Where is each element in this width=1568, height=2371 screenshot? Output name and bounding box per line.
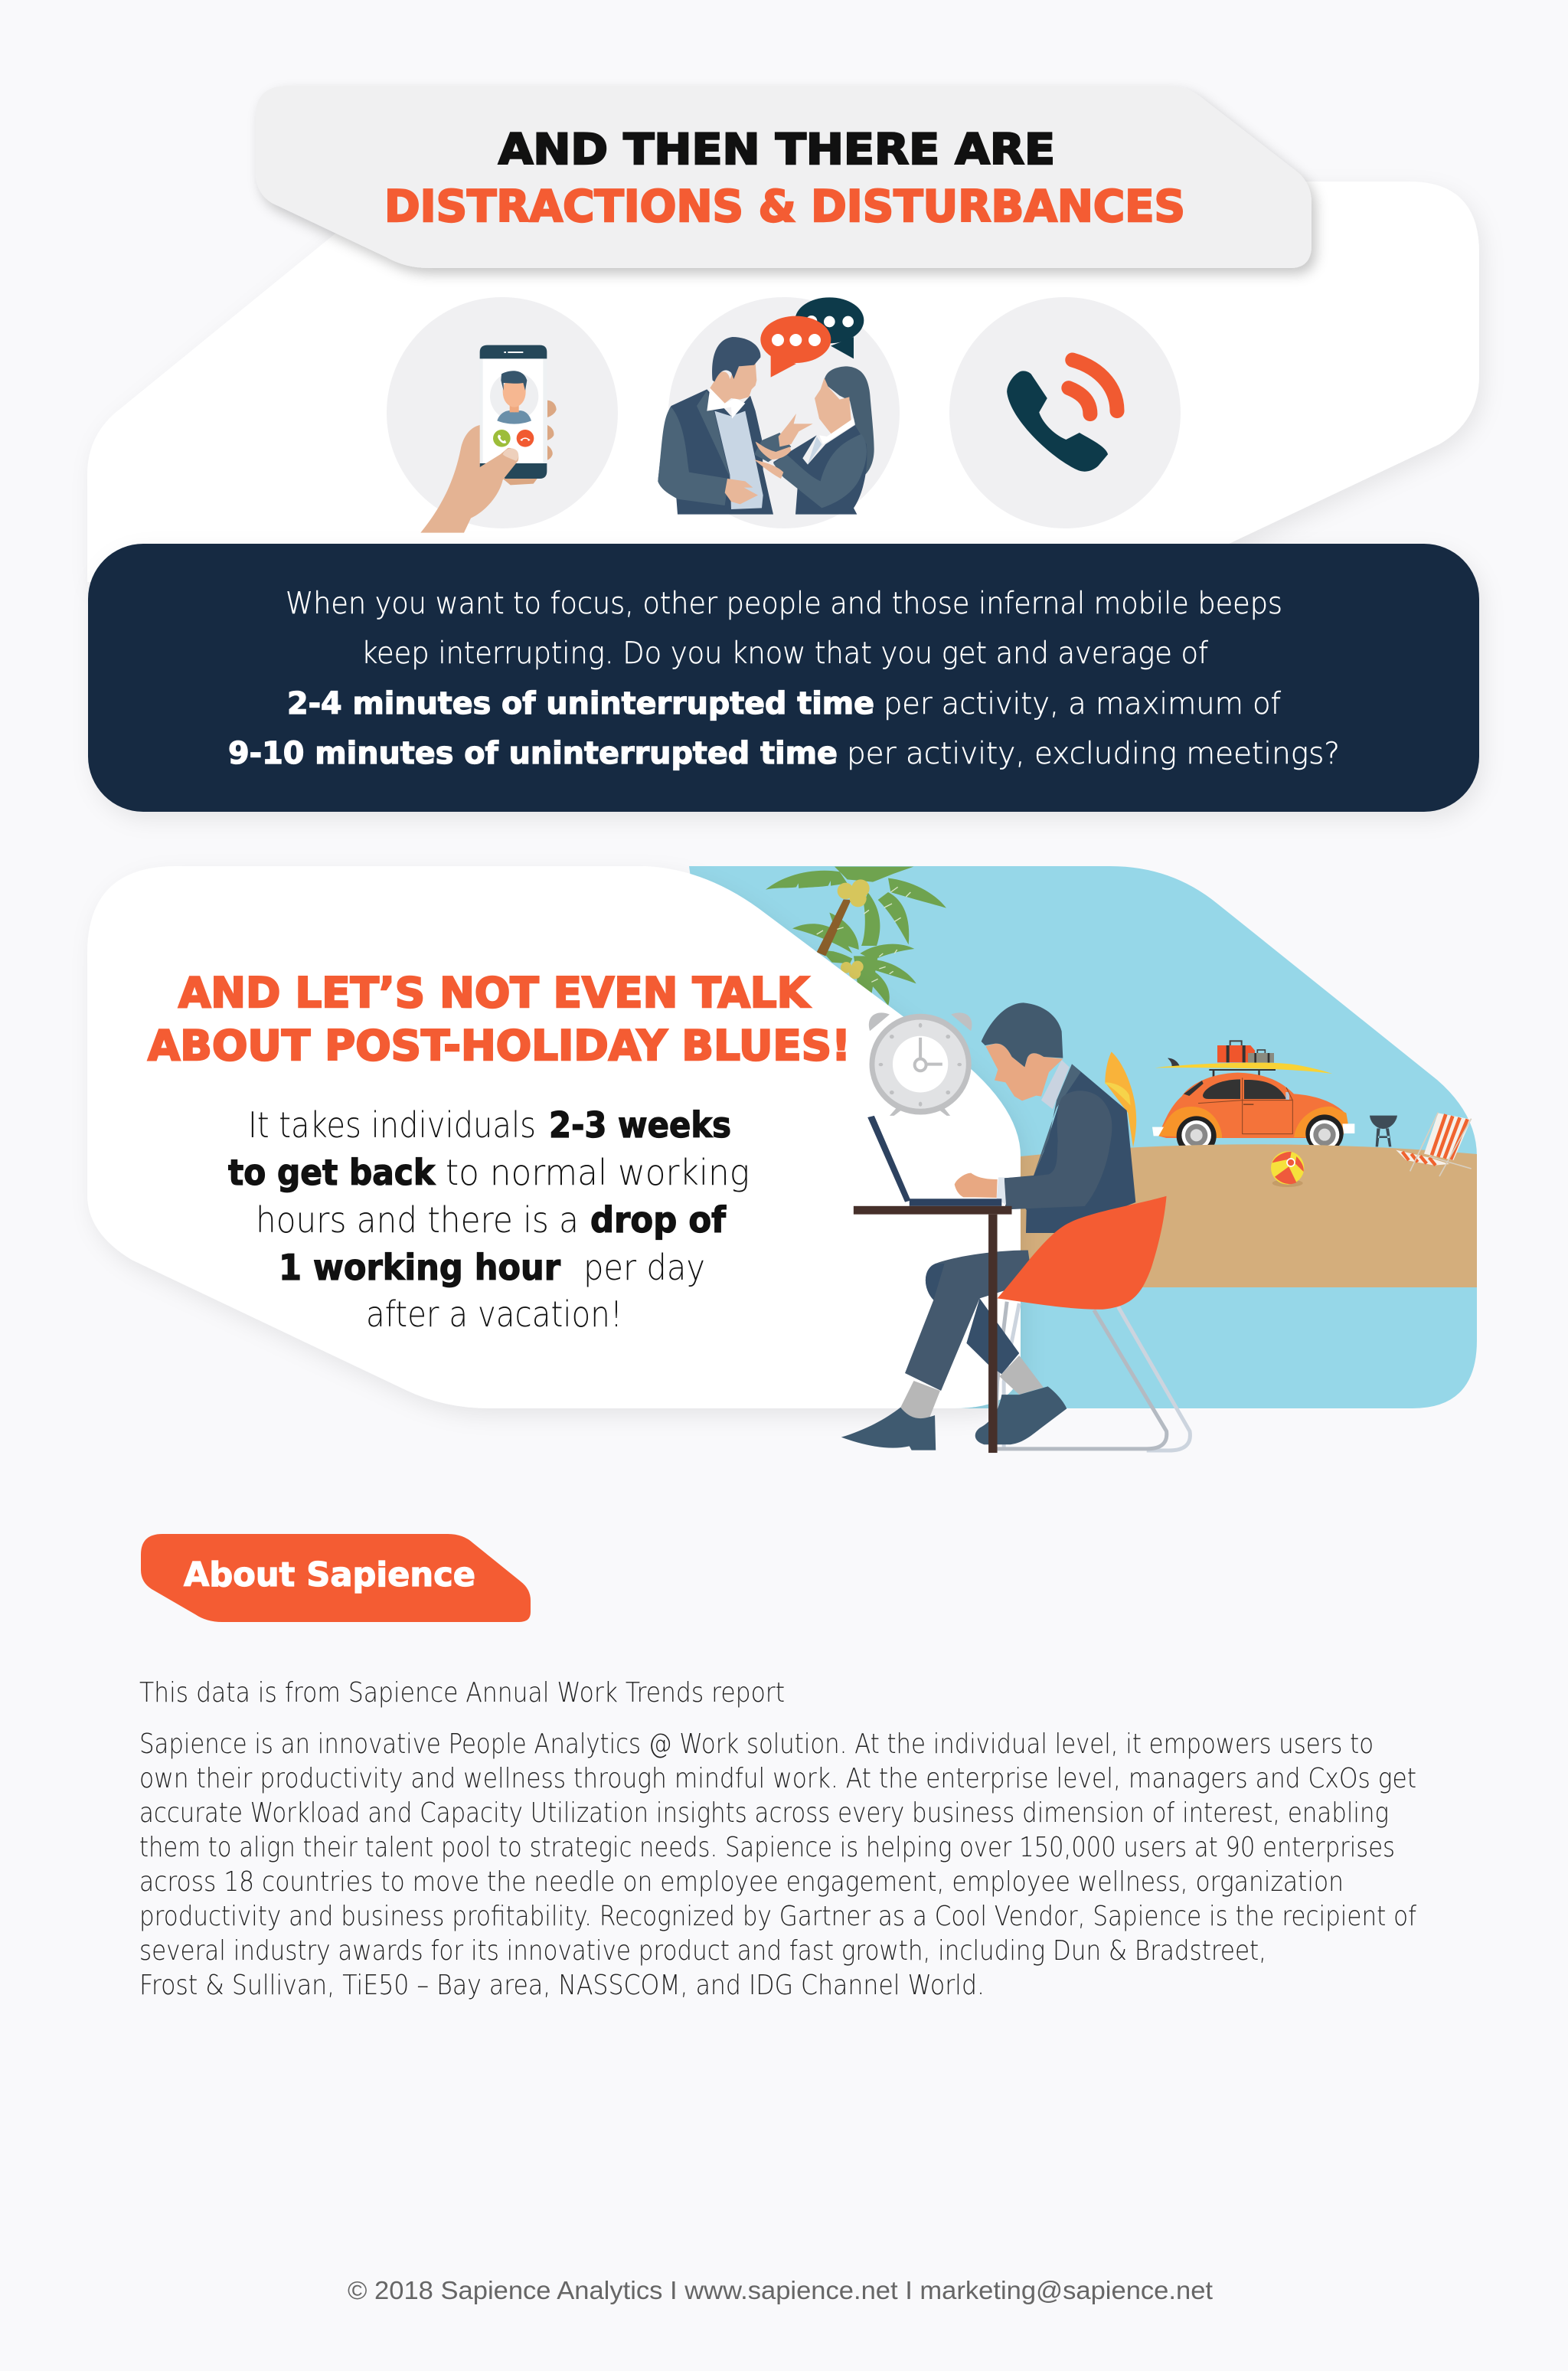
text block: vacation statistic: after a vacation! xyxy=(366,1293,622,1335)
car xyxy=(1152,1073,1354,1156)
body line 4 xyxy=(228,736,1340,771)
text block: vacation statistic: to get back xyxy=(228,1152,436,1193)
surfboard on roof xyxy=(1155,1058,1332,1077)
text block: about paragraph: several industry awards for its innovative product and fast growth, including Dun & Bradstreet, xyxy=(139,1935,1266,1967)
body line 3 xyxy=(287,686,1281,721)
text block: about paragraph xyxy=(139,1728,1416,2001)
panel: distractions white card xyxy=(87,182,1479,582)
text block: about paragraph: own their productivity and wellness through mindful work. At the enterprise level, managers and CxOs get xyxy=(139,1763,1416,1794)
text block: vacation statistic xyxy=(228,1104,750,1335)
orange speech bubble xyxy=(760,316,831,378)
icon: alarm clock xyxy=(869,1012,972,1116)
panel: post-holiday white card xyxy=(87,866,1021,1408)
text block: about paragraph: Frost & Sullivan, TiE50 – Bay area, NASSCOM, and IDG Channel World. xyxy=(139,1970,985,2001)
text block: about paragraph: Sapience is an innovative People Analytics @ Work solution. At the individual level, it empowers users to xyxy=(139,1728,1374,1760)
back leg, sock, shoe xyxy=(966,1298,1067,1444)
footer: © 2018 Sapience Analytics I www.sapience.net I marketing@sapience.net xyxy=(348,2276,1213,2304)
body line 1: When you want to focus, other people and those infernal mobile beeps xyxy=(286,587,1282,621)
text block: vacation statistic: per day xyxy=(583,1247,705,1288)
body line 2: keep interrupting. Do you know that you get and average of xyxy=(361,636,1208,671)
beach props on sand xyxy=(1271,1113,1472,1187)
illustration: palm trees xyxy=(766,867,946,1006)
front leg, sock, shoe xyxy=(841,1250,1032,1450)
woman xyxy=(754,366,874,515)
body line 3: per activity, a maximum of xyxy=(884,687,1281,721)
about sapience badge xyxy=(141,1534,531,1622)
about sapience badge: About Sapience xyxy=(184,1555,475,1594)
title banner xyxy=(256,86,1312,268)
text block: vacation statistic: to normal working xyxy=(446,1152,750,1193)
text: data source: This data is from Sapience Annual Work Trends report xyxy=(139,1677,785,1709)
beach ball xyxy=(1271,1151,1304,1187)
body line 3: 2-4 minutes of uninterrupted time xyxy=(287,686,874,721)
panel: dark text box xyxy=(88,544,1479,812)
illustration: car on the beach xyxy=(1152,1041,1397,1156)
text block: about paragraph: accurate Workload and Capacity Utilization insights across every business dimension of interest, enabling xyxy=(139,1797,1389,1829)
text block: vacation statistic: drop of xyxy=(590,1199,727,1241)
chair seat xyxy=(998,1196,1167,1310)
grill xyxy=(1370,1116,1397,1146)
beach chair xyxy=(1396,1113,1472,1176)
text block: vacation statistic: It takes individuals xyxy=(248,1104,536,1146)
text block: about paragraph: across 18 countries to move the needle on employee engagement, employee wellness, organization xyxy=(139,1866,1344,1898)
icon: ringing phone xyxy=(949,297,1181,528)
illustration: clock and man's legs xyxy=(841,1012,1190,1450)
laptop xyxy=(867,1116,1001,1206)
icon: hand holding phone xyxy=(387,297,618,533)
sand xyxy=(1021,1144,1477,1287)
man xyxy=(658,337,813,515)
text block: vacation statistic: hours and there is a xyxy=(256,1199,579,1241)
dark speech bubble xyxy=(795,297,864,358)
title line 1: AND THEN THERE ARE xyxy=(498,125,1055,174)
surfboard behind person xyxy=(1105,1051,1136,1147)
heading: post-holiday blues xyxy=(148,969,851,1070)
heading: post-holiday blues: AND LET’S NOT EVEN TALK xyxy=(178,969,811,1017)
luggage xyxy=(1217,1041,1274,1063)
body line 4: 9-10 minutes of uninterrupted time xyxy=(228,736,838,771)
icon: two people talking xyxy=(658,297,900,528)
illustration: chair, laptop and desk xyxy=(854,1116,1167,1453)
heading: post-holiday blues: ABOUT POST-HOLIDAY BLUES! xyxy=(148,1022,851,1070)
panel: beach scene background xyxy=(689,866,1477,1408)
text block: vacation statistic: 1 working hour xyxy=(279,1247,560,1288)
text block: vacation statistic: 2-3 weeks xyxy=(549,1104,731,1146)
title line 2: DISTRACTIONS & DISTURBANCES xyxy=(384,182,1185,232)
desk xyxy=(854,1206,1012,1453)
chair legs xyxy=(993,1302,1190,1450)
illustration: man's torso and head xyxy=(955,1002,1135,1233)
body line 4: per activity, excluding meetings? xyxy=(847,737,1340,771)
